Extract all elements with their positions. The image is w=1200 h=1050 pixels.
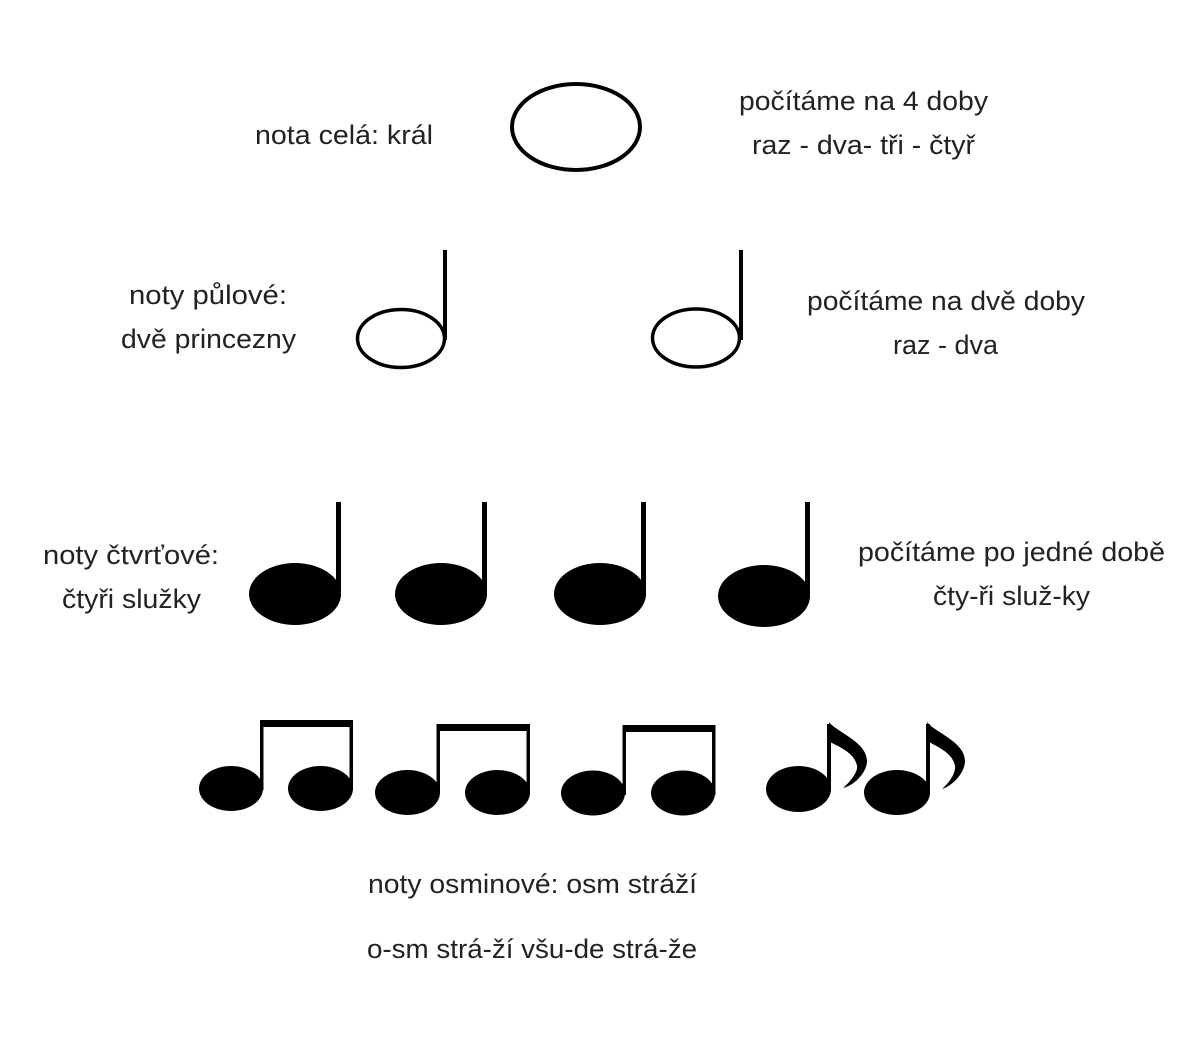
icon: flagged eighth note 1 bbox=[766, 722, 867, 812]
icon: quarter note 4 bbox=[718, 502, 810, 627]
text: whole note counting bbox=[739, 86, 989, 160]
label: quarter notes: noty čtvrťové: bbox=[43, 540, 219, 570]
text: quarter note counting bbox=[858, 537, 1165, 611]
text: half note counting bbox=[807, 286, 1086, 360]
icon: quarter note 2 bbox=[395, 502, 487, 625]
label: half notes: dvě princezny bbox=[121, 324, 297, 354]
text: quarter note counting: čty-ři služ-ky bbox=[933, 581, 1091, 611]
text: half note counting: raz - dva bbox=[893, 330, 999, 360]
icon: half note 2 bbox=[652, 250, 743, 367]
icon: flagged eighth note 2 bbox=[864, 722, 965, 815]
icon: quarter note 1 bbox=[249, 502, 341, 625]
text: whole note counting: počítáme na 4 doby bbox=[739, 86, 989, 116]
label: whole note: nota celá: král bbox=[255, 120, 433, 150]
icon: whole note bbox=[512, 84, 640, 170]
label: half notes bbox=[121, 280, 297, 354]
icon: beamed eighth notes 2 bbox=[375, 724, 530, 815]
label: half notes: noty půlové: bbox=[129, 280, 287, 310]
text: eighth note counting: o-sm strá-ží všu-de strá-že bbox=[367, 934, 697, 964]
label: quarter notes: čtyři služky bbox=[62, 584, 202, 614]
icon: half note 1 bbox=[358, 250, 447, 368]
label: quarter notes bbox=[43, 540, 219, 614]
text: quarter note counting: počítáme po jedné době bbox=[858, 537, 1165, 567]
icon: quarter note 3 bbox=[554, 502, 646, 625]
text: whole note counting: raz - dva- tři - čtyř bbox=[752, 130, 976, 160]
text: half note counting: počítáme na dvě doby bbox=[807, 286, 1086, 316]
icon: beamed eighth notes 3 bbox=[561, 725, 716, 816]
label: eighth notes: noty osminové: osm stráží bbox=[368, 869, 698, 899]
icon: beamed eighth notes 1 bbox=[199, 720, 353, 811]
